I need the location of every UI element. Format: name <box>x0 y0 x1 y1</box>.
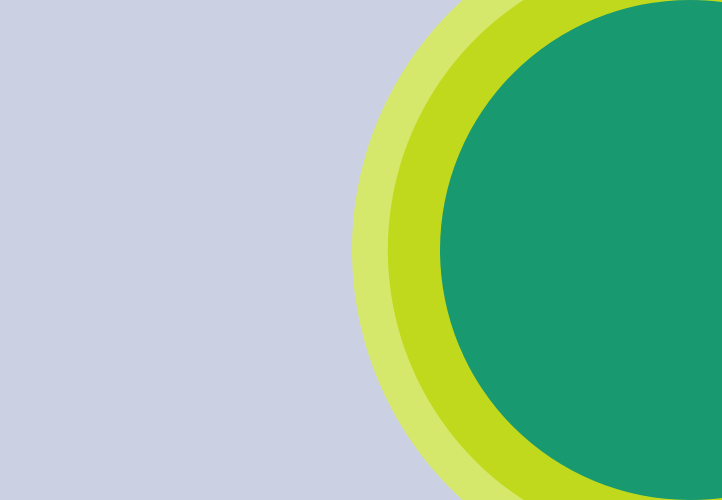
inner teal circle <box>440 0 722 500</box>
middle lime circle <box>388 0 722 500</box>
outer light green circle <box>352 0 722 500</box>
